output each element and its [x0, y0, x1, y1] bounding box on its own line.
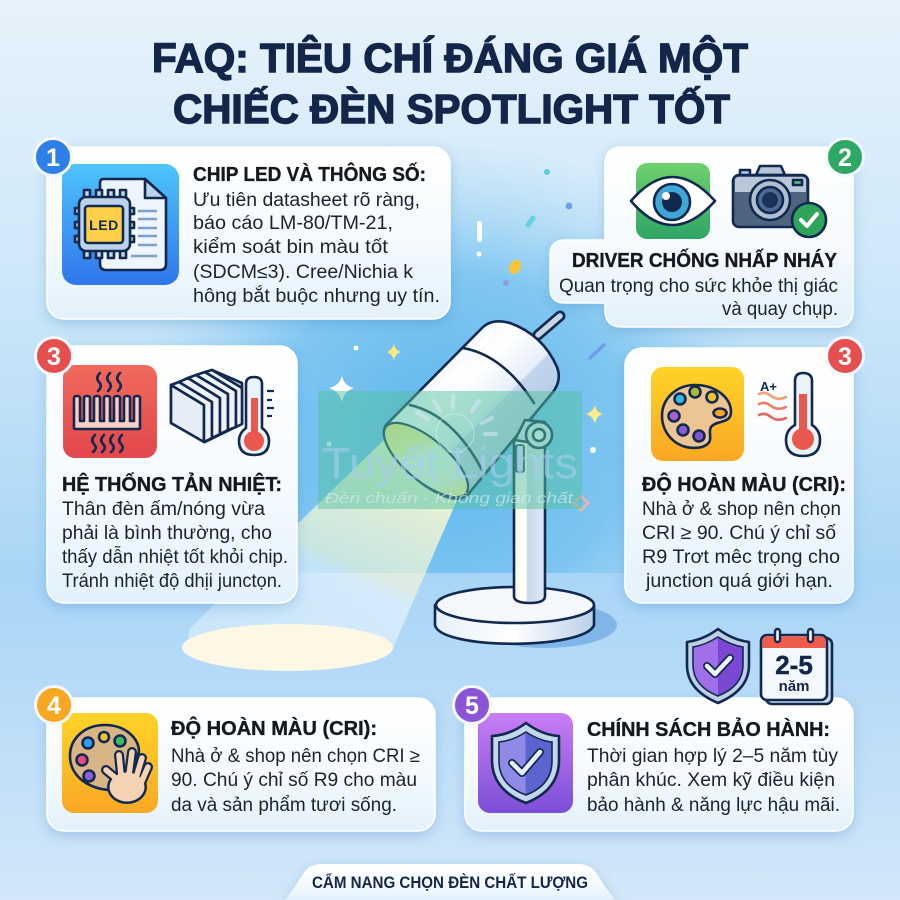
- card 3 text: phải là bình thường, cho: [62, 523, 272, 544]
- icon: eye: [631, 163, 715, 239]
- icon: thermometer and heat waves: A+: [760, 379, 777, 394]
- panel 4: CRI: [36, 686, 435, 831]
- icon: calendar 2-5 years: năm: [779, 678, 809, 695]
- title: [152, 35, 748, 132]
- card 5 background: [465, 698, 853, 831]
- lamp base: [435, 587, 594, 644]
- card 5 text: CHÍNH SÁCH BẢO HÀNH:: [587, 718, 830, 741]
- badge 4: [36, 686, 72, 724]
- footer tab: CẨM NANG CHỌN ĐÈN CHẤT LƯỢNG: [312, 873, 588, 892]
- lamp head: [373, 321, 559, 510]
- card 2 text: và quay chụp.: [722, 299, 838, 320]
- card 3 text: Thân đèn ấm/nóng vừa: [62, 499, 265, 520]
- card 1 text: CHIP LED VÀ THÔNG SỐ:: [193, 162, 426, 186]
- card 1 text: [193, 162, 440, 307]
- lamp base shadow: [473, 602, 617, 648]
- card 4 background: [47, 698, 435, 831]
- icon: heat fins: [63, 365, 157, 458]
- card 1 text: kiểm soát bin màu tốt: [193, 237, 389, 258]
- badge 2: 2: [838, 144, 852, 172]
- card 4 text: 90. Chú ý chỉ số R9 cho màu: [171, 770, 417, 791]
- card 4 text: da và sản phẩm tươi sống.: [171, 795, 397, 816]
- badge 5: 5: [465, 692, 479, 720]
- card 3 right text: junction quá giới hạn.: [645, 571, 833, 592]
- card 3 text: thấy dẫn nhiệt tốt khỏi chip.: [62, 546, 288, 568]
- panel 3 left: cooling: [36, 338, 297, 603]
- watermark: Tuyết Lights: [322, 439, 578, 488]
- badge 4: 4: [47, 692, 61, 720]
- card 5 text: Thời gian hợp lý 2–5 năm tùy: [587, 746, 838, 767]
- title: FAQ: TIÊU CHÍ ĐÁNG GIÁ MỘT: [152, 35, 748, 81]
- card 3 right background: [625, 348, 853, 603]
- card 2 text: Quan trọng cho sức khỏe thị giác: [559, 276, 838, 297]
- icon: LED chip and datasheet: [62, 164, 179, 285]
- card 4 text: [171, 716, 420, 816]
- icon: calendar 2-5 years: 2-5: [775, 650, 813, 680]
- spotlight lamp: [373, 316, 617, 648]
- lamp pole: [514, 440, 545, 603]
- card 2 text: [559, 248, 838, 320]
- icon: calendar 2-5 years: [761, 629, 832, 704]
- icon: LED chip and datasheet: LED: [89, 217, 119, 233]
- watermark: [318, 391, 582, 509]
- card 3 background: [47, 346, 297, 603]
- badge 1: 1: [46, 144, 60, 172]
- panel 3 right: color rendering: [625, 338, 864, 603]
- card 3 right text: CRI ≥ 90. Chú ý chỉ số: [642, 523, 836, 544]
- badge 1: [34, 138, 72, 176]
- card 3 right text: R9 Trơt mêc trọng cho: [642, 547, 840, 568]
- icon: palette and hand: [62, 713, 158, 813]
- icon: thermometer and heat waves: [759, 373, 820, 456]
- card 3 text: HỆ THỐNG TẢN NHIỆT:: [62, 472, 282, 496]
- badge 3 left: [36, 338, 72, 374]
- card 3 text: [62, 472, 288, 592]
- card 3 text: Tránh nhiệt độ dhịi junctọn.: [62, 571, 282, 592]
- card 1 background: [47, 147, 450, 319]
- panel 5: warranty: [454, 686, 853, 831]
- badge 3 left: 3: [47, 343, 61, 371]
- card 5 text: phân khúc. Xem kỹ điều kiện: [587, 770, 835, 791]
- card 4 text: Nhà ở & shop nên chọn CRI ≥: [171, 746, 420, 767]
- decorative sparkles: [326, 169, 604, 510]
- icon: shield in purple tile: [478, 713, 573, 813]
- watermark: Đèn chuẩn - Không gian chất: [325, 490, 574, 507]
- card 1 text: báo cáo LM-80/TM-21,: [193, 213, 393, 234]
- light beam and floor spot: [182, 438, 457, 671]
- icon: camera with check: [733, 166, 826, 237]
- card 1 text: (SDCM≤3). Cree/Nichia k: [193, 262, 414, 283]
- icon: warranty shield: [687, 629, 749, 703]
- card 3 right text: [642, 472, 846, 592]
- footer tab: [285, 864, 615, 900]
- panel 2: driver: [550, 138, 864, 327]
- badge 3 right: 3: [838, 343, 852, 371]
- lamp joint: [515, 420, 552, 448]
- card 2 text: DRIVER CHỐNG NHẤP NHÁY: [572, 248, 838, 272]
- card 5 text: [587, 718, 840, 816]
- badge 3 right: [826, 338, 864, 374]
- card 1 text: hông bắt buộc nhưng uy tín.: [193, 285, 440, 307]
- icon: heatsink and thermometer: [171, 370, 274, 455]
- title: CHIẾC ĐÈN SPOTLIGHT TỐT: [173, 86, 730, 132]
- badge 5: [454, 686, 490, 724]
- card 3 right text: Nhà ở & shop nên chọn: [642, 499, 841, 520]
- card 1 text: Ưu tiên datasheet rõ ràng,: [193, 190, 420, 211]
- card 2 background: [550, 147, 853, 327]
- card 5 text: bảo hành & năng lực hậu mãi.: [587, 795, 840, 816]
- card 3 right text: ĐỘ HOÀN MÀU (CRI):: [642, 472, 846, 496]
- badge 2: [826, 138, 864, 176]
- lamp rear rod: [538, 316, 560, 335]
- card 4 text: ĐỘ HOÀN MÀU (CRI):: [171, 716, 377, 740]
- icon: paint palette: [651, 367, 744, 461]
- panel 1: chip LED: [34, 138, 450, 319]
